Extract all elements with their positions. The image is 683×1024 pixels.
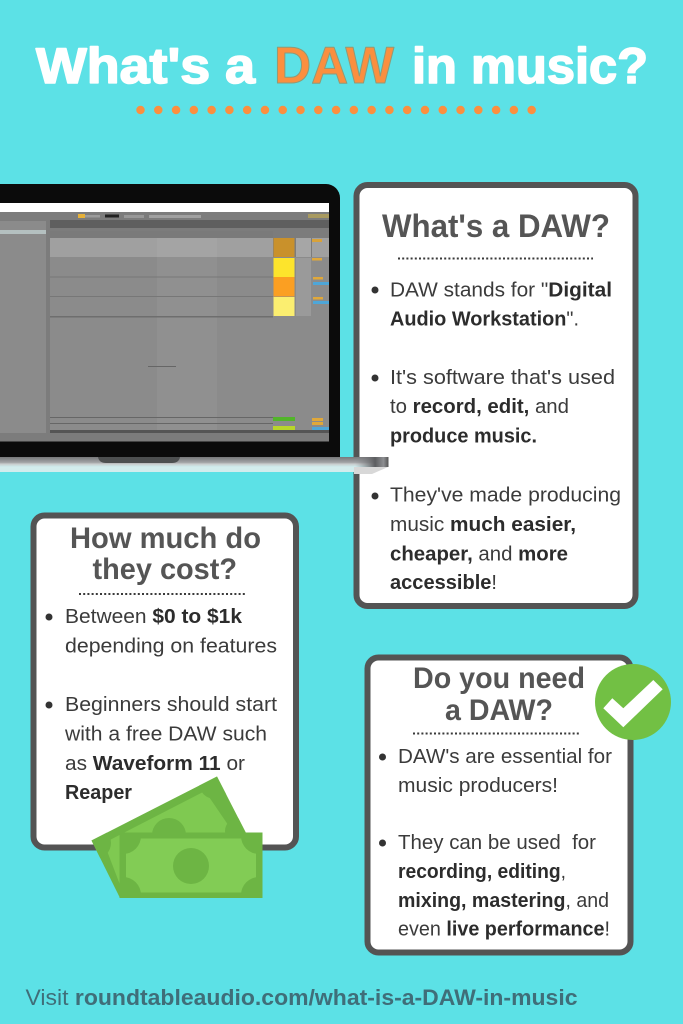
text block: uses — [379, 831, 610, 940]
text block: beginner advice: with a free DAW such — [64, 722, 267, 746]
panel: how much do they cost — [34, 516, 296, 848]
text block: uses: recording, editing, — [398, 860, 566, 883]
text block: benefits: accessible! — [390, 571, 497, 594]
text block: price range: depending on features — [65, 634, 277, 658]
laptop with DAW screenshot — [0, 184, 388, 474]
heading: do you need a DAW: a DAW? — [445, 694, 553, 727]
heading: what's a DAW: What's a DAW? — [382, 208, 610, 244]
text block: benefits — [372, 484, 621, 594]
text block: beginner advice: Reaper — [65, 781, 132, 804]
heading: do you need a DAW: Do you need — [413, 662, 585, 695]
text block: what it does: It's software that's used — [390, 366, 615, 389]
text block: uses: They can be used for — [398, 831, 596, 854]
text block: price range: Between $0 to $1k — [65, 605, 243, 628]
DAW screen — [0, 203, 329, 442]
title: in music? — [412, 38, 648, 94]
icon: money bills — [92, 776, 262, 898]
text block: beginner advice: as Waveform 11 or — [65, 752, 245, 775]
text block: essential — [379, 745, 612, 797]
text block: uses: mixing, mastering, and — [398, 889, 609, 912]
footer link: Visit roundtableaudio.com/what-is-a-DAW-in-music — [26, 985, 578, 1010]
text block: benefits: cheaper, and more — [390, 542, 568, 566]
text block: price range — [46, 605, 277, 658]
text block: what it does: to record, edit, and — [390, 395, 569, 418]
heading: do you need a DAW — [413, 662, 585, 727]
laptop bezel — [0, 184, 340, 458]
heading: how much do they cost — [70, 522, 261, 586]
icon: green check mark — [595, 664, 671, 740]
title: What's a — [36, 38, 256, 94]
laptop base — [0, 457, 388, 474]
heading: how much do they cost: How much do — [70, 522, 261, 555]
text block: definition: DAW stands for "Digital — [390, 278, 612, 302]
text block: essential: DAW's are essential for — [398, 745, 612, 768]
text block: definition: Audio Workstation". — [390, 308, 579, 330]
panel: what's a DAW — [356, 185, 636, 606]
back bill — [92, 776, 246, 897]
text block: beginner advice: Beginners should start — [65, 693, 277, 716]
title — [36, 37, 648, 95]
text block: definition — [372, 278, 612, 330]
title dotted underline — [140, 106, 532, 114]
title: DAW — [274, 37, 395, 95]
panel: do you need a DAW — [368, 658, 630, 952]
heading: how much do they cost: they cost? — [92, 553, 237, 586]
text block: what it does: produce music. — [390, 424, 537, 448]
text block: beginner advice — [46, 693, 277, 804]
text block: benefits: music much easier, — [390, 513, 576, 536]
text block: benefits: They've made producing — [390, 484, 621, 506]
text block: uses: even live performance! — [398, 918, 610, 940]
text block: what it does — [372, 366, 615, 448]
text block: essential: music producers! — [398, 774, 558, 797]
front bill — [120, 832, 262, 898]
